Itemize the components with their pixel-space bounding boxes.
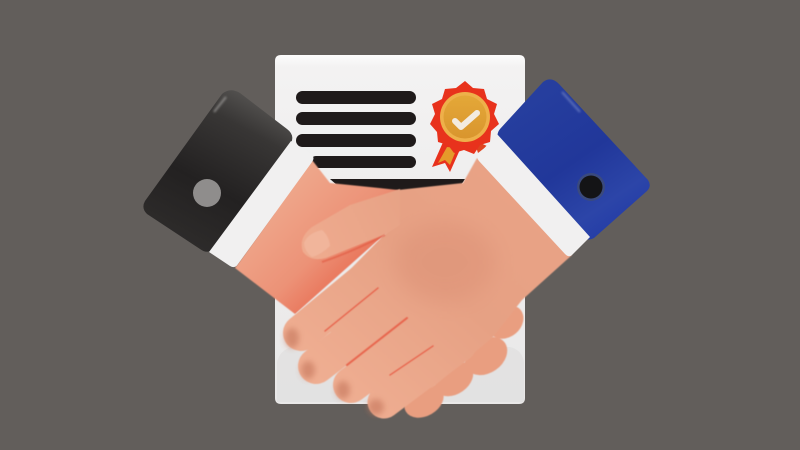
finger tips shading — [285, 328, 384, 415]
right hand — [285, 158, 572, 415]
seal check mark — [455, 113, 477, 127]
white shirt cuff — [478, 134, 590, 256]
document text lines — [296, 91, 465, 192]
left hand thumb — [302, 189, 400, 262]
blue cuff — [498, 79, 650, 240]
certificate seal — [430, 81, 499, 172]
seal rosette — [430, 81, 499, 154]
black cuff — [143, 90, 292, 252]
black button — [577, 173, 605, 201]
left hand back palm — [235, 160, 398, 314]
grey button — [193, 179, 221, 207]
thumb nail — [304, 230, 330, 257]
back hand fingers — [398, 298, 530, 424]
left hand — [235, 160, 530, 424]
palm shading — [395, 222, 495, 302]
seal medal — [440, 92, 490, 142]
panel: black sleeve — [143, 90, 314, 267]
blue cuff highlight — [562, 92, 580, 112]
thumb shadow line — [322, 235, 385, 262]
panel: contract document — [275, 55, 525, 404]
seal ribbon — [432, 140, 462, 172]
document lower fold — [277, 347, 524, 402]
finger separators — [325, 288, 433, 375]
black cuff highlight — [214, 97, 226, 112]
right hand palm — [320, 158, 572, 405]
white shirt cuff — [209, 141, 314, 267]
front fingers — [301, 258, 460, 402]
panel: blue sleeve — [478, 79, 650, 256]
